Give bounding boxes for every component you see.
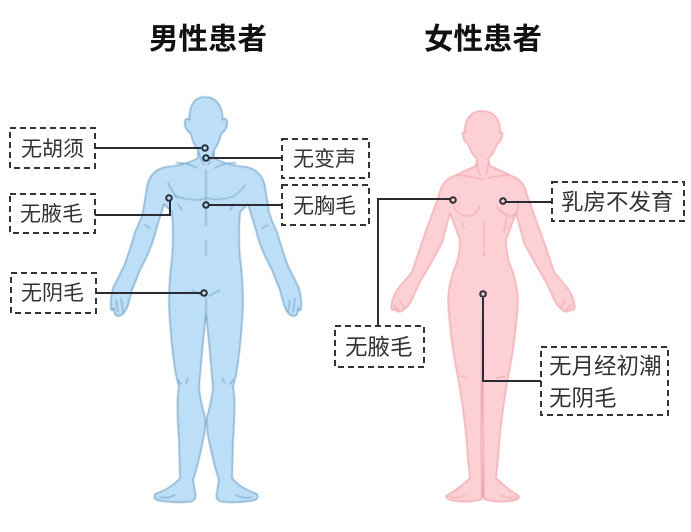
callout: no underarm hair, female: 无腋毛 [345,335,413,360]
callout: breasts undeveloped: 乳房不发育 [561,190,674,215]
leader line: no beard [95,147,201,149]
callout: no beard: 无胡须 [21,138,84,161]
marker: no chest hair [203,202,209,208]
figure: male body [111,97,301,502]
callout: no menarche, no pubic hair: 无阴毛 [549,386,617,411]
callout: no chest hair: 无胸毛 [293,195,356,218]
callout: no underarm hair, female [335,199,450,367]
marker: no voice change [203,155,209,161]
callout: no pubic hair, male: 无阴毛 [21,282,84,305]
leader line: no pubic hair, male [96,292,201,294]
marker: no underarm hair, female [450,197,456,203]
leader line: no menarche, no pubic hair [483,298,541,381]
marker: no menarche, no pubic hair [480,291,486,297]
callout: no chest hair [209,185,369,225]
leader line: no voice change [209,157,282,159]
leader line: breasts undeveloped [506,201,552,203]
callout: no voice change: 无变声 [293,148,356,171]
marker: no pubic hair, male [201,290,207,296]
callout: no menarche, no pubic hair [483,298,668,415]
marker: no underarm hair, male [166,195,172,201]
leader line: no chest hair [209,204,282,206]
callout: no voice change [209,139,369,178]
callout: no underarm hair, male: 无腋毛 [20,203,83,226]
callout: no pubic hair, male [11,273,201,313]
figure: female body [391,111,575,502]
callout: no beard [10,128,201,168]
callout: no menarche, no pubic hair: 无月经初潮 [549,354,662,379]
leader line: no underarm hair, male [95,201,170,215]
marker: breasts undeveloped [500,198,506,204]
title: male patients: 男性患者 [149,23,267,56]
marker: no beard [202,145,208,151]
leader line: no underarm hair, female [378,199,450,326]
title: female patients: 女性患者 [424,23,542,56]
callout: no underarm hair, male [10,194,170,233]
callout: breasts undeveloped [506,182,684,221]
